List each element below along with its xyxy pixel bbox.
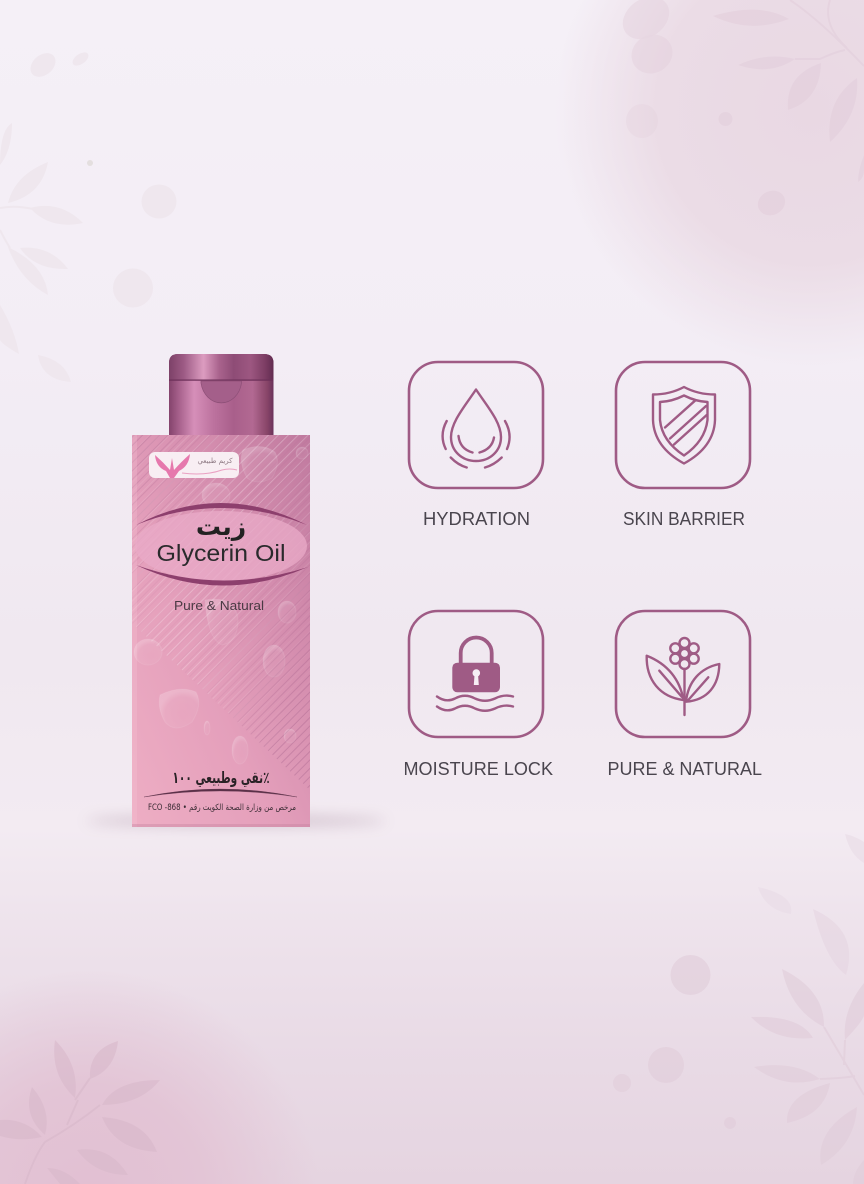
icon: water drop bbox=[443, 390, 510, 468]
feature: pure and natural bbox=[608, 611, 762, 779]
tagline: Pure & Natural bbox=[174, 598, 264, 613]
water droplets bbox=[134, 446, 308, 764]
label: SKIN BARRIER bbox=[623, 509, 745, 529]
product name: Glycerin Oil bbox=[156, 540, 286, 566]
icon: flower with leaves bbox=[647, 638, 719, 715]
feature: skin barrier bbox=[616, 362, 750, 529]
decorative leaves: bottom left bbox=[0, 1040, 160, 1184]
licence line: FCO -868 • مرخص من وزارة الصحة الكويت رقم bbox=[148, 803, 296, 813]
product bottle bbox=[132, 354, 310, 827]
feature: hydration bbox=[409, 362, 543, 529]
label: MOISTURE LOCK bbox=[404, 759, 553, 779]
label: PURE & NATURAL bbox=[608, 759, 762, 779]
label oval bbox=[135, 503, 308, 586]
feature: moisture lock bbox=[404, 611, 553, 779]
decorative leaves: top right bbox=[615, 0, 864, 220]
brand logo badge bbox=[149, 452, 239, 478]
icon: shield bbox=[653, 387, 715, 464]
arabic tagline: نقي وطبيعي ١٠٠٪ bbox=[172, 768, 270, 788]
decorative leaves: left bbox=[0, 48, 176, 382]
bottle cap bbox=[169, 354, 274, 435]
bottle shadow bbox=[86, 816, 386, 826]
decorative leaves: bottom right bbox=[613, 834, 864, 1184]
logo swoosh bbox=[182, 469, 237, 474]
logo wings bbox=[155, 454, 190, 478]
label: HYDRATION bbox=[423, 509, 530, 529]
icon: padlock over water bbox=[437, 638, 513, 711]
logo text: كريم طبيعي bbox=[197, 457, 233, 465]
product name arabic: زيت bbox=[196, 512, 246, 541]
curved divider bbox=[144, 789, 297, 797]
bottle label panel bbox=[132, 435, 310, 827]
